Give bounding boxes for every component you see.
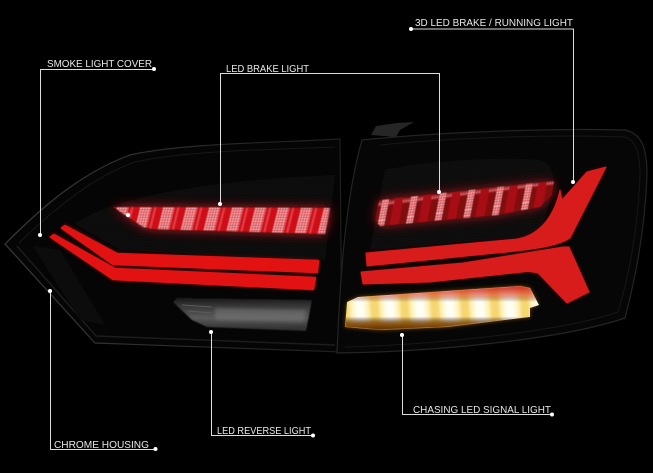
callout: LED reverse light <box>209 330 315 438</box>
right LED brake light <box>375 181 554 226</box>
right tail light assembly <box>337 122 647 353</box>
left LED brake light <box>113 207 330 234</box>
callout: LED reverse light: LED REVERSE LIGHT <box>217 426 311 437</box>
left lamp housing <box>5 139 342 352</box>
callout: 3D LED brake / running light <box>409 18 575 184</box>
red glow behind right brake light <box>375 181 554 226</box>
callout: chasing LED signal light: CHASING LED SIGNAL LIGHT <box>413 405 551 416</box>
callout: LED brake light: LED BRAKE LIGHT <box>226 64 309 75</box>
red glow behind left brake light <box>113 207 330 234</box>
callout: 3D LED brake / running light: 3D LED BRAKE / RUNNING LIGHT <box>415 18 573 29</box>
right lamp housing <box>337 130 647 353</box>
left tail light assembly <box>5 139 342 352</box>
smoke carbon panel <box>75 175 335 260</box>
callout: smoke light cover <box>38 59 156 237</box>
callout: chrome housing: CHROME HOUSING <box>54 440 149 451</box>
callout: smoke light cover: SMOKE LIGHT COVER <box>47 59 152 70</box>
trunk hinge detail <box>371 122 414 137</box>
right 3D running light <box>361 167 606 303</box>
callout: chrome housing <box>48 289 158 451</box>
left running light bars <box>50 224 319 290</box>
right carbon panel <box>370 159 553 250</box>
left LED reverse light <box>173 298 312 331</box>
callout: chasing LED signal light <box>400 333 554 416</box>
callout: LED brake light <box>218 64 441 206</box>
chasing amber signal light <box>342 283 540 333</box>
